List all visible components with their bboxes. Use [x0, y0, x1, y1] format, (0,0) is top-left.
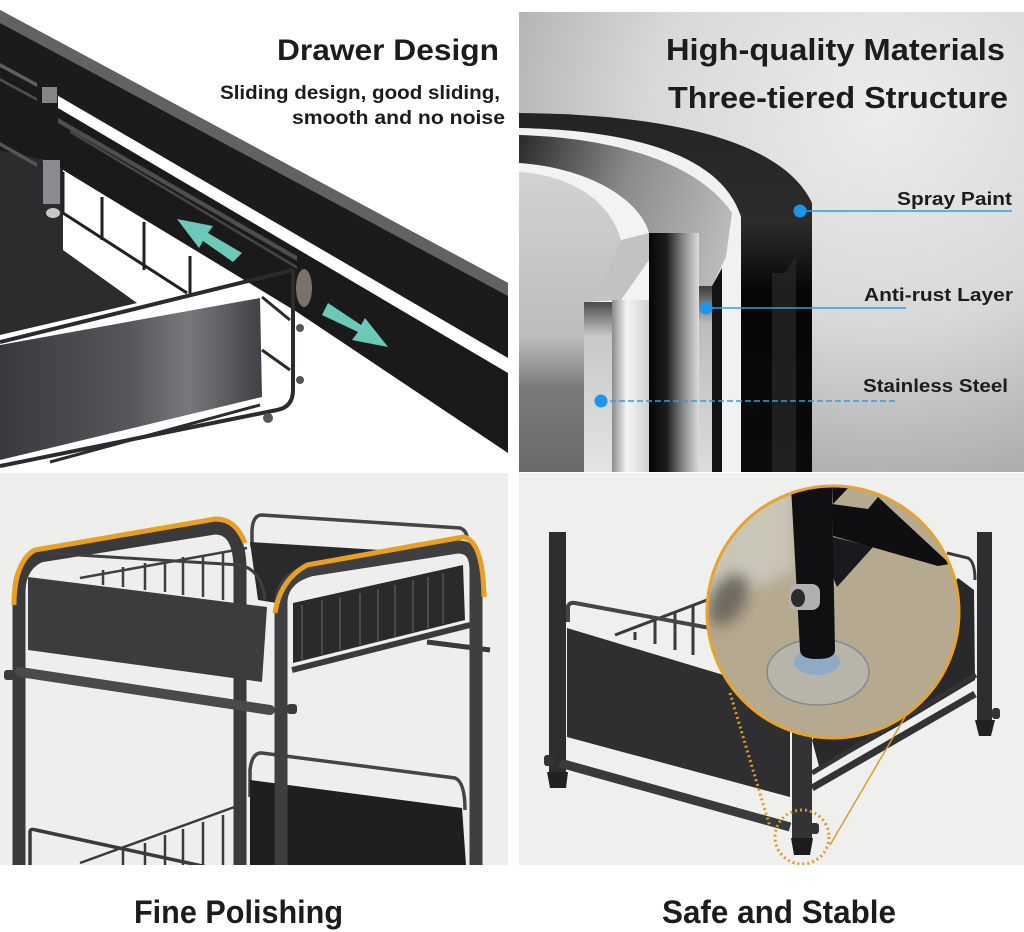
polish highlight: right: [275, 537, 484, 613]
curved wire: [78, 554, 266, 600]
bracket screw: [46, 208, 60, 218]
rack: [544, 532, 1000, 855]
text: sliding description: Sliding design, good sliding,: [220, 82, 500, 104]
right frame tube: [281, 547, 476, 865]
circle inset: [699, 480, 959, 738]
layer: anti-rust: [519, 135, 732, 286]
zoom marker: [730, 693, 905, 864]
arrow: slide back: [177, 219, 242, 262]
drawer wire grid: [63, 172, 190, 295]
front rod: [20, 672, 270, 710]
lower panel: [250, 780, 466, 865]
slider wheel: [296, 269, 312, 307]
heading: materials: High-quality Materials: [666, 32, 1005, 67]
upper bracket: [42, 87, 57, 103]
polish highlight: left: [14, 519, 245, 605]
caption: fine polishing: Fine Polishing: [134, 894, 343, 930]
drawer wire frame: [0, 270, 293, 466]
panel: materials: [519, 12, 1024, 472]
label: stainless steel: Stainless Steel: [863, 376, 1008, 396]
rod knob left: [4, 670, 12, 680]
callout dots: [594, 204, 806, 408]
label: anti-rust layer: Anti-rust Layer: [864, 285, 1013, 305]
panel: safe and stable: [519, 473, 1024, 865]
ribbed panel: [293, 565, 465, 663]
side wires: [80, 548, 247, 600]
bolts: [263, 324, 304, 423]
heading: structure: Three-tiered Structure: [668, 80, 1008, 115]
upper rail: [0, 10, 508, 358]
lower slide rail: [0, 60, 508, 453]
drawer floor: [0, 140, 137, 335]
layer: spray paint: [519, 113, 812, 472]
layer: stainless steel: [519, 163, 649, 302]
text: sliding description: smooth and no noise: [292, 107, 505, 129]
arrow: slide forward: [322, 303, 388, 347]
panel: fine polishing: [0, 473, 508, 867]
back panel: [250, 542, 380, 603]
heading: drawer design: Drawer Design: [277, 34, 499, 67]
back rail: [250, 515, 467, 810]
spray paint inner step: [772, 256, 796, 472]
white rim: [519, 128, 741, 472]
text: sliding description: [220, 82, 505, 129]
left frame tube: [19, 528, 240, 865]
front panel: [28, 577, 267, 682]
lower wires: [30, 805, 240, 867]
panel: drawer design: [0, 0, 508, 472]
cross rods: [292, 625, 490, 670]
label: spray paint: Spray Paint: [897, 189, 1012, 209]
caption: safe and stable: Safe and Stable: [662, 894, 896, 930]
side bracket: [43, 160, 60, 204]
rod knob right: [287, 704, 297, 714]
drawer front panel: [0, 298, 262, 460]
callout lines: [601, 211, 1012, 401]
